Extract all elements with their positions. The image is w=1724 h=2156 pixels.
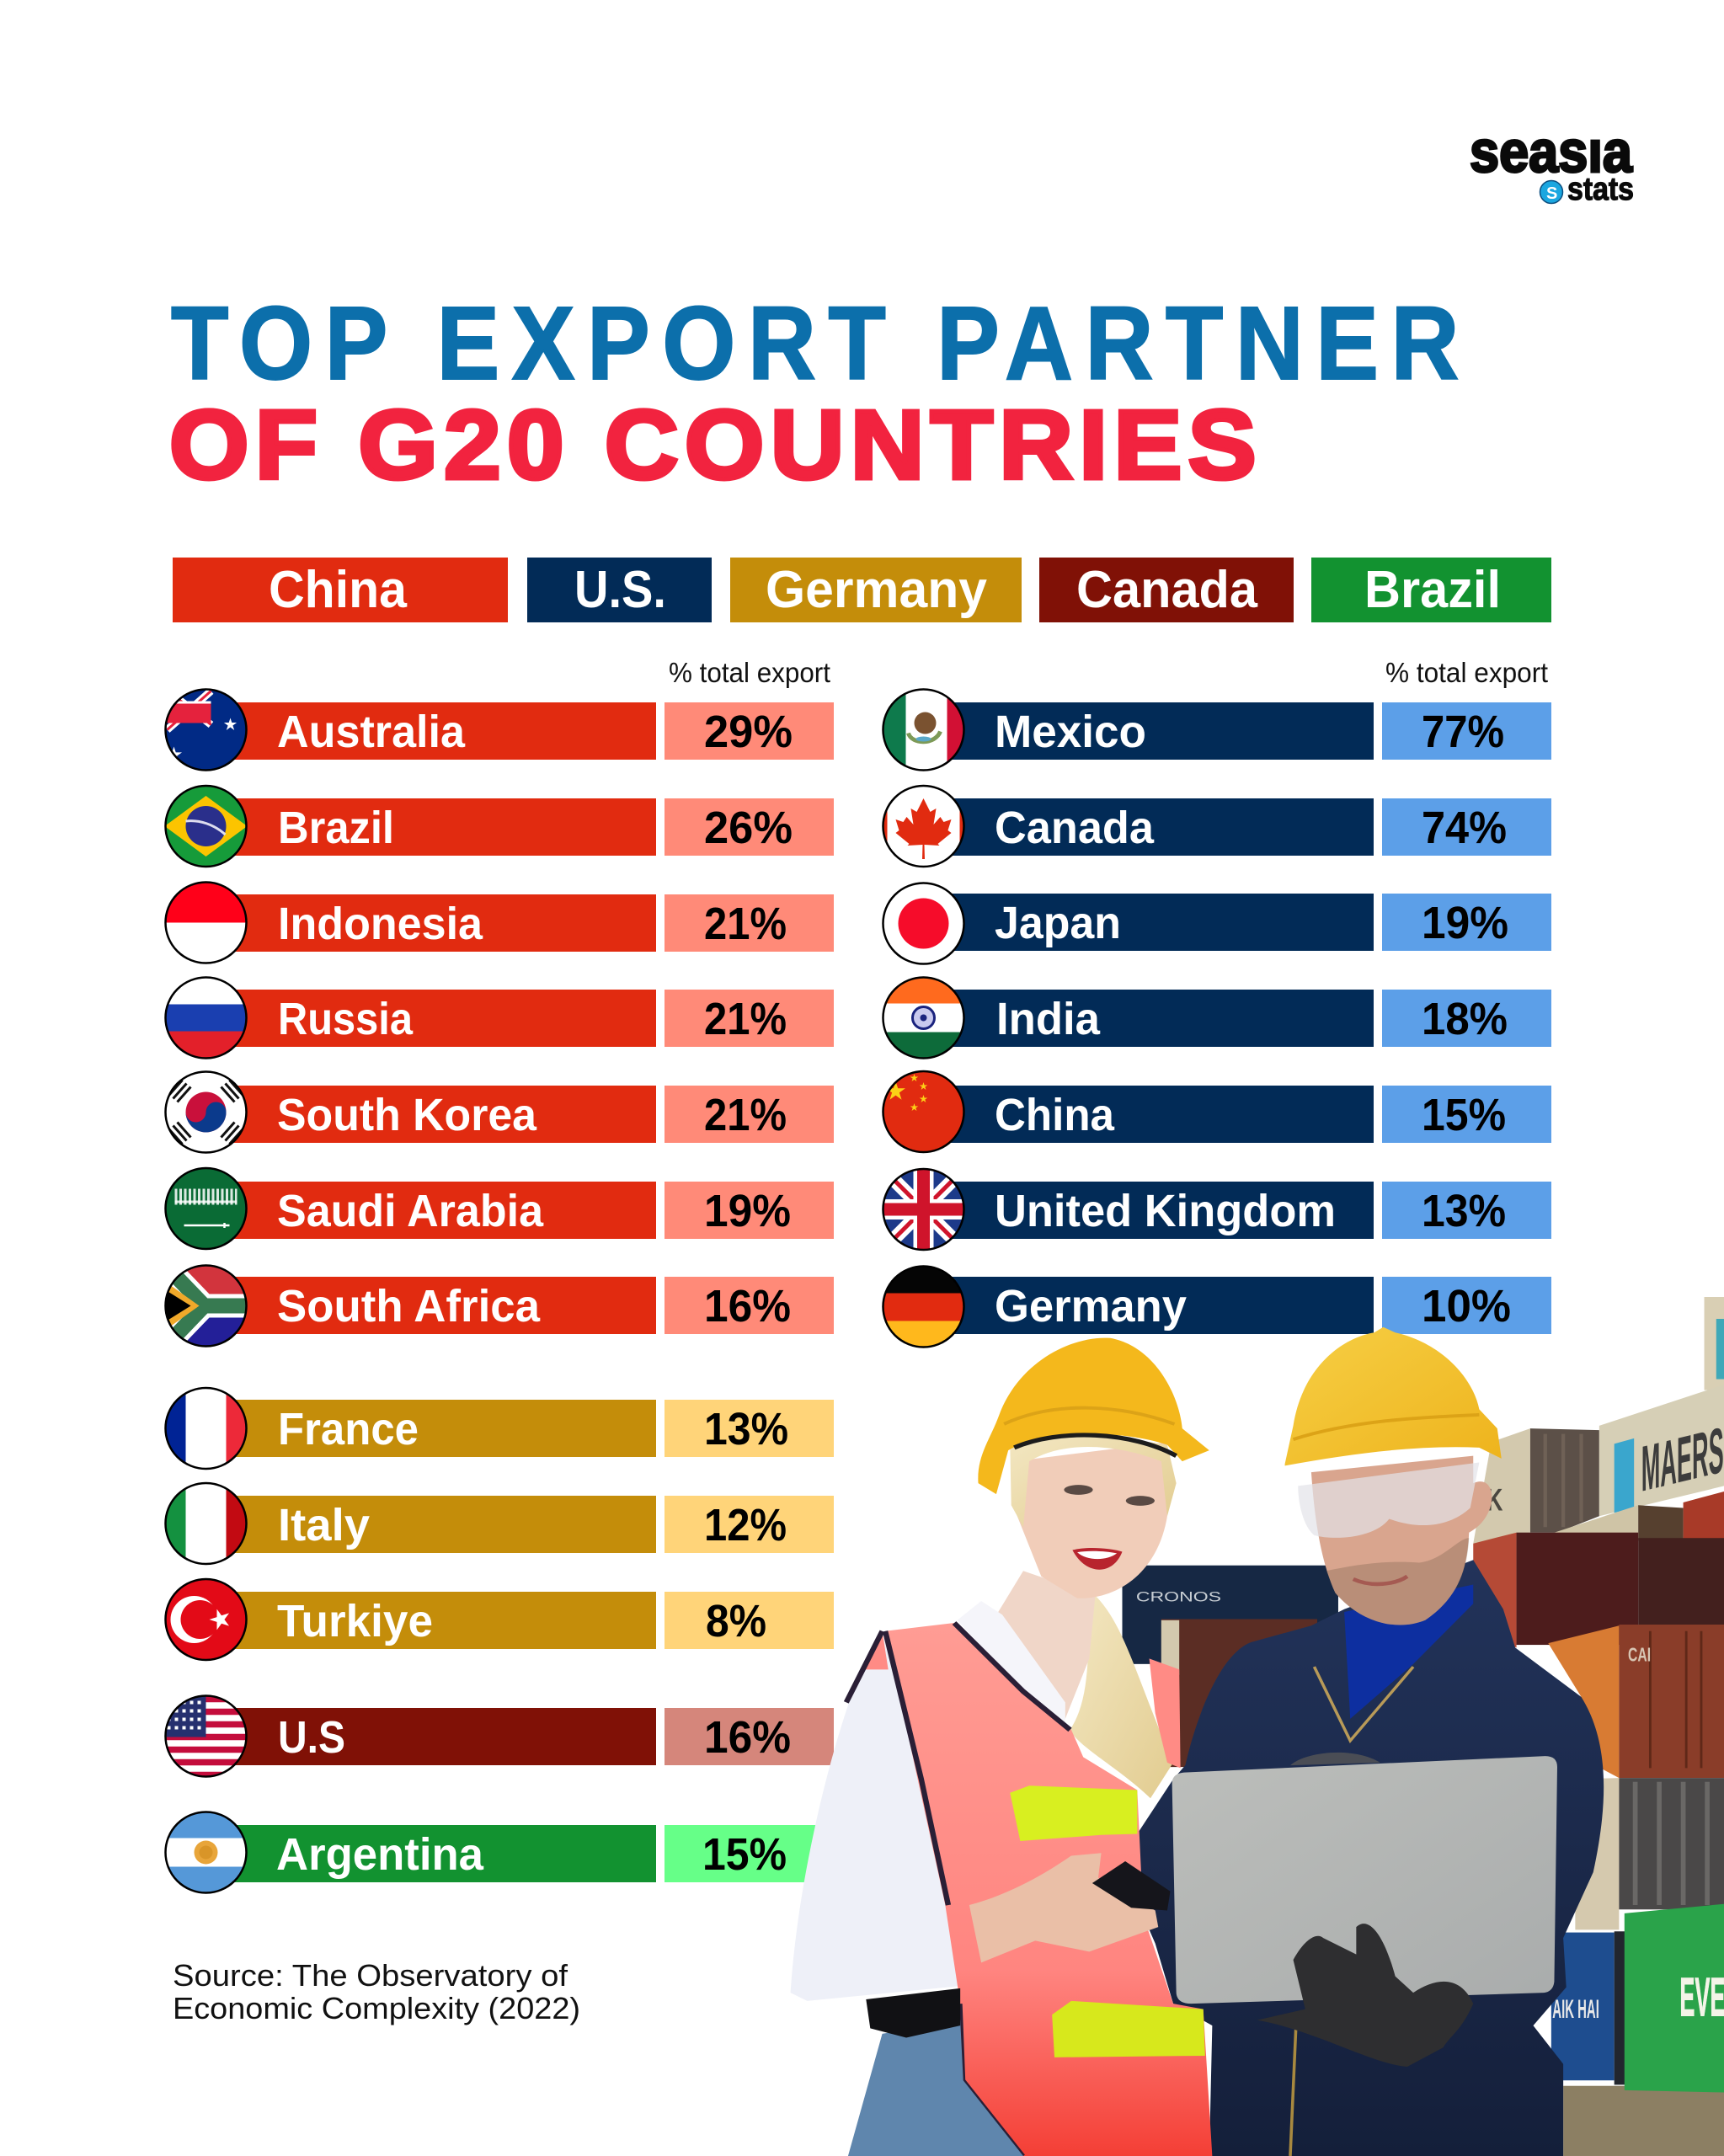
row: Turkiye: Turkiye bbox=[277, 1596, 433, 1646]
column header right: % total export bbox=[1385, 657, 1548, 688]
legend: Germany bbox=[766, 561, 987, 619]
row: Japan: 19% bbox=[1422, 898, 1508, 948]
man bbox=[1119, 1327, 1604, 2156]
row: Australia: 29% bbox=[704, 707, 793, 757]
row: Turkiye: 8% bbox=[706, 1596, 766, 1646]
row: Japan: Japan bbox=[995, 898, 1121, 948]
logo: seasia stats: stats bbox=[1567, 172, 1634, 207]
row: South Korea: 21% bbox=[704, 1090, 787, 1140]
flag: South Africa bbox=[163, 1263, 248, 1348]
woman bbox=[791, 1338, 1212, 2156]
flag: United Kingdom bbox=[881, 1167, 965, 1251]
row: Canada: 74% bbox=[1422, 803, 1507, 853]
row: China: China bbox=[995, 1090, 1115, 1140]
row: Australia bbox=[163, 687, 834, 771]
source note bbox=[173, 1958, 580, 2025]
row: Argentina: Argentina bbox=[276, 1829, 484, 1880]
row: Germany bbox=[881, 1265, 1551, 1349]
row: Canada: Canada bbox=[995, 803, 1155, 853]
flag: Russia bbox=[163, 975, 248, 1059]
flag: Japan bbox=[881, 881, 965, 965]
flag: Italy bbox=[163, 1481, 248, 1566]
legend: China bbox=[269, 561, 407, 619]
row: Indonesia: 21% bbox=[704, 899, 787, 949]
legend: Brazil bbox=[1364, 561, 1501, 619]
row: India: India bbox=[996, 994, 1101, 1044]
row: Indonesia bbox=[163, 881, 834, 965]
flag: Canada bbox=[881, 784, 965, 868]
row: U.S: 16% bbox=[704, 1712, 791, 1763]
row: Indonesia: Indonesia bbox=[278, 899, 483, 949]
row: Russia: 21% bbox=[704, 994, 787, 1044]
laptop and glove bbox=[1172, 1753, 1557, 2067]
row: Mexico: 77% bbox=[1422, 707, 1504, 757]
legend bbox=[173, 558, 1551, 622]
row: Saudi Arabia: Saudi Arabia bbox=[277, 1186, 544, 1236]
legend: Canada bbox=[1076, 561, 1257, 619]
row: France bbox=[163, 1386, 834, 1470]
row: India bbox=[881, 975, 1551, 1059]
row: South Africa: South Africa bbox=[277, 1281, 541, 1331]
legend: U.S. bbox=[574, 561, 666, 619]
row: Germany: Germany bbox=[995, 1281, 1187, 1331]
row: Argentina bbox=[163, 1811, 834, 1895]
row: Japan bbox=[881, 881, 1551, 965]
row: Canada bbox=[881, 784, 1551, 868]
row: France: 13% bbox=[704, 1404, 788, 1454]
flag: Brazil bbox=[163, 784, 248, 868]
background: stacked shipping containers: AIK HAI bbox=[1552, 1994, 1599, 2024]
logo: seasia stats: S bbox=[1546, 184, 1557, 203]
flag: China bbox=[881, 1070, 965, 1154]
logo: seasia stats: seasia bbox=[1470, 119, 1633, 184]
title bbox=[169, 286, 1471, 499]
flag: Mexico bbox=[881, 687, 965, 771]
flag: Germany bbox=[881, 1265, 965, 1349]
row: South Africa: 16% bbox=[704, 1281, 791, 1331]
row: U.S bbox=[163, 1694, 834, 1779]
background: stacked shipping containers bbox=[1123, 1297, 1724, 2156]
source note: Source: The Observatory of bbox=[173, 1958, 568, 1993]
row: Mexico bbox=[881, 687, 1551, 771]
row: Brazil: Brazil bbox=[278, 803, 394, 853]
flag: Australia bbox=[163, 687, 248, 771]
column header left: % total export bbox=[669, 657, 830, 688]
row: Saudi Arabia: 19% bbox=[704, 1186, 791, 1236]
row: South Korea: South Korea bbox=[277, 1090, 537, 1140]
row: Russia: Russia bbox=[278, 994, 414, 1044]
row: Russia bbox=[163, 975, 834, 1059]
row: Australia: Australia bbox=[277, 707, 466, 757]
row: United Kingdom: United Kingdom bbox=[995, 1186, 1336, 1236]
flag: Indonesia bbox=[163, 881, 248, 965]
row: Argentina: 15% bbox=[702, 1829, 787, 1880]
flag: Turkiye bbox=[163, 1577, 248, 1662]
row: China bbox=[881, 1070, 1551, 1154]
row: Turkiye bbox=[163, 1577, 834, 1662]
row: U.S: U.S bbox=[278, 1712, 345, 1763]
title: OF G20 COUNTRIES bbox=[169, 390, 1262, 499]
flag: Saudi Arabia bbox=[163, 1166, 248, 1251]
logo: seasia stats bbox=[1470, 118, 1634, 207]
row: Italy bbox=[163, 1481, 834, 1566]
background: stacked shipping containers: CRONOS bbox=[1136, 1588, 1221, 1604]
background: stacked shipping containers: K bbox=[1486, 1483, 1503, 1518]
row: Mexico: Mexico bbox=[995, 707, 1146, 757]
flag: India bbox=[881, 975, 965, 1059]
photo: workers in container yard bbox=[791, 1297, 1724, 2156]
row: Germany: 10% bbox=[1422, 1281, 1511, 1331]
row: Brazil bbox=[163, 784, 834, 868]
title: TOP EXPORT PARTNER bbox=[171, 286, 1471, 402]
flag: France bbox=[163, 1386, 248, 1470]
row: Italy: Italy bbox=[278, 1500, 370, 1550]
flag: Argentina bbox=[163, 1811, 248, 1895]
source note: Economic Complexity (2022) bbox=[173, 1991, 580, 2025]
row: Saudi Arabia bbox=[163, 1166, 834, 1251]
row: Brazil: 26% bbox=[704, 803, 793, 853]
flag: U.S bbox=[163, 1694, 248, 1779]
row: India: 18% bbox=[1422, 994, 1508, 1044]
row: United Kingdom bbox=[881, 1167, 1551, 1251]
flag: South Korea bbox=[163, 1070, 248, 1154]
row: South Africa bbox=[163, 1263, 834, 1348]
row: China: 15% bbox=[1422, 1090, 1506, 1140]
row: France: France bbox=[278, 1404, 419, 1454]
row: United Kingdom: 13% bbox=[1422, 1186, 1506, 1236]
row: South Korea bbox=[163, 1070, 834, 1154]
row: Italy: 12% bbox=[704, 1500, 787, 1550]
background: stacked shipping containers: CAI bbox=[1628, 1645, 1651, 1666]
